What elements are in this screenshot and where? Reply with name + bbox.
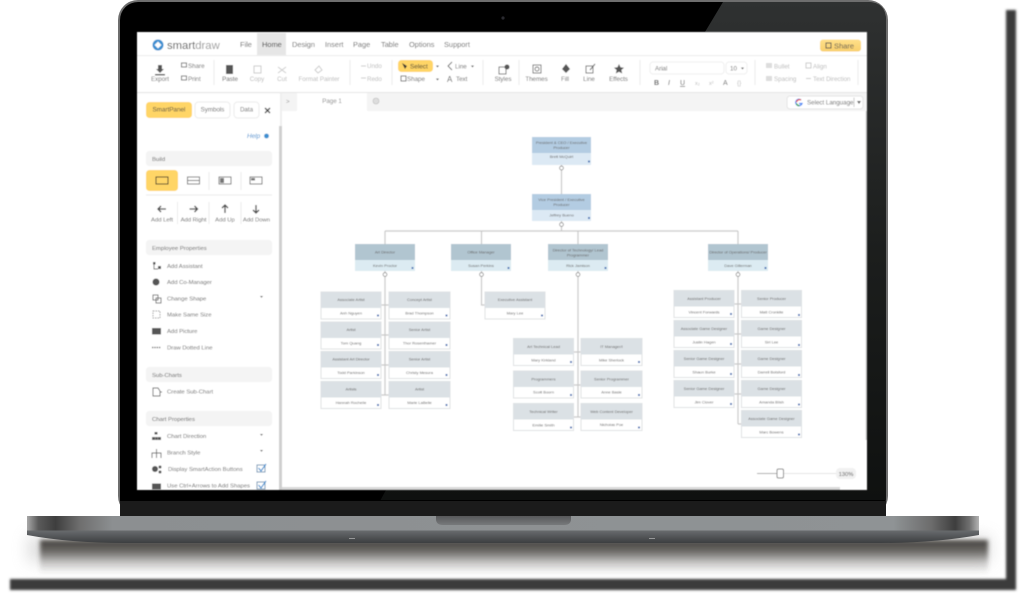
- operations team: Game Designer: [757, 326, 786, 331]
- box: President: Producer: [553, 145, 570, 150]
- ribbon toolbar: Share: [188, 63, 205, 70]
- ribbon toolbar: [137, 60, 867, 93]
- employee properties: Employee Properties: [152, 246, 207, 252]
- box: Vice President: Jeffrey Bueno: [549, 212, 575, 218]
- employee properties: Add Picture: [167, 329, 198, 335]
- panel tabs: SmartPanel: [153, 106, 185, 114]
- ribbon toolbar: Print: [188, 76, 201, 83]
- panel tabs: Symbols: [201, 106, 224, 114]
- box: Director of Operations: Dave Gillerman: [724, 263, 752, 268]
- ribbon toolbar: Undo: [367, 63, 382, 70]
- ribbon toolbar: Fill: [561, 76, 569, 83]
- ribbon toolbar: Shape: [407, 76, 425, 83]
- org chart connectors: [381, 165, 741, 424]
- panel tabs: [146, 102, 270, 118]
- operations team: Amanda Blish: [759, 400, 784, 404]
- logo: smartdraw: [167, 40, 221, 52]
- box: Director of Technology: Programmer: [567, 252, 590, 258]
- font selector: [650, 62, 747, 74]
- art team: Tom Quang: [341, 340, 361, 346]
- art team: Christy Mesura: [406, 370, 434, 375]
- menu bar: Options: [409, 40, 435, 49]
- language selector: Select Language: [807, 100, 854, 106]
- technology team: Programmers: [531, 376, 556, 382]
- select button: [398, 60, 433, 72]
- box: Office Manager: Susan Perkins: [468, 263, 494, 268]
- ribbon toolbar: Effects: [609, 76, 628, 83]
- text style buttons: x₂: [695, 81, 700, 87]
- zoom slider: 130%: [839, 472, 853, 478]
- box: President: [532, 137, 591, 165]
- ribbon toolbar: Redo: [367, 76, 382, 83]
- operations team: Assistant Producer: [687, 296, 721, 301]
- select button: Select: [410, 64, 428, 70]
- webcam: [501, 16, 505, 20]
- art team: Concept Artist: [407, 297, 433, 302]
- art team: Marie LaBelle: [407, 400, 432, 405]
- box: Director of Technology: Rick Jamison: [566, 263, 590, 268]
- build section: Build: [152, 157, 165, 163]
- ribbon toolbar: Bullet: [774, 64, 790, 70]
- ribbon toolbar: Spacing: [774, 76, 797, 83]
- share button: [820, 40, 861, 52]
- chart properties: Display SmartAction Buttons: [168, 467, 243, 473]
- ribbon toolbar: Styles: [495, 76, 511, 83]
- page tab bar: Page 1: [322, 98, 342, 105]
- operations team: Game Designer: [757, 356, 786, 361]
- technology team: [514, 338, 642, 430]
- employee properties: Change Shape: [167, 296, 207, 302]
- box: Vice President: Vice President / Executive: [538, 197, 585, 202]
- employee properties: Add Assistant: [167, 264, 203, 270]
- menu bar: Insert: [325, 40, 343, 49]
- language selector: [787, 96, 863, 109]
- box: Director of Operations: [708, 244, 768, 271]
- box: Executive Assistant: [485, 292, 545, 319]
- ribbon toolbar: Line: [583, 76, 595, 83]
- ribbon toolbar: Paste: [222, 76, 238, 83]
- operations team: Game Designer: [757, 386, 786, 391]
- art team: Todd Parkinson: [337, 370, 365, 375]
- ribbon toolbar: Text: [456, 76, 468, 83]
- box: Art Director: Art Director: [375, 250, 396, 254]
- add direction buttons: [151, 205, 270, 224]
- operations team: Senior Producer: [757, 296, 787, 301]
- ribbon toolbar: Text Direction: [813, 76, 851, 83]
- laptop lid: [118, 0, 888, 516]
- box: Executive Assistant: Executive Assistant: [498, 297, 533, 302]
- art team: Thor Rosenthamer: [403, 340, 437, 346]
- operations team: Darrell Botsford: [758, 370, 785, 374]
- operations team: Associate Game Designer: [748, 416, 795, 421]
- operations team: Associate Game Designer: [681, 326, 728, 331]
- base shadow: [28, 536, 990, 574]
- box: President: Brett McQuirt: [550, 154, 574, 159]
- canvas scrollbars: [282, 111, 867, 490]
- panel tabs: Data: [240, 106, 254, 114]
- operations team: [674, 290, 802, 438]
- ribbon toolbar: Copy: [250, 76, 265, 83]
- ribbon toolbar: Cut: [277, 76, 287, 83]
- text style buttons: B: [654, 80, 659, 87]
- operations team: Vincent Forwards: [688, 310, 720, 314]
- technology team: Emilie Smith: [532, 422, 555, 428]
- text style buttons: [654, 80, 742, 87]
- ribbon toolbar: Align: [813, 64, 827, 70]
- technology team: Anne Basle: [601, 390, 622, 394]
- operations team: Justin Hagen: [692, 340, 716, 344]
- app screen: [137, 32, 867, 490]
- art team: Artist: [346, 327, 356, 332]
- technology team: Mike Sherlock: [599, 358, 624, 362]
- share button: Share: [834, 42, 854, 50]
- text style buttons: x²: [709, 81, 714, 87]
- art team: Associate Artist: [337, 297, 366, 302]
- technology team: Technical Writer: [529, 409, 558, 414]
- art team: Senior Artist: [409, 356, 431, 362]
- menu bar: Support: [444, 40, 470, 49]
- technology team: Scott Boorn: [533, 390, 554, 394]
- technology team: Art Technical Lead: [527, 344, 560, 349]
- text style buttons: {}: [737, 80, 742, 87]
- build section: [146, 151, 272, 224]
- art team: [321, 292, 450, 408]
- font selector: 10: [730, 66, 737, 72]
- technology team: Mary Kirkland: [531, 358, 556, 362]
- menu bar: File: [240, 40, 252, 49]
- operations team: Shaun Burke: [692, 370, 716, 374]
- menu bar: Page: [353, 40, 370, 49]
- operations team: Senior Game Designer: [684, 356, 725, 361]
- box: Director of Operations: Director of Operations/ Producer: [709, 250, 767, 254]
- employee properties: [146, 240, 272, 352]
- employee properties: Add Co-Manager: [167, 280, 212, 286]
- add direction buttons: Add Right: [181, 218, 207, 224]
- ribbon toolbar: Themes: [525, 76, 548, 83]
- text style buttons: U: [680, 80, 685, 87]
- box: Executive Assistant: Mary Lee: [507, 310, 524, 316]
- add direction buttons: Add Up: [215, 218, 236, 224]
- chart properties: [146, 411, 272, 490]
- employee properties: Make Same Size: [167, 312, 212, 318]
- laptop base: [27, 516, 979, 543]
- box: Director of Technology: [548, 244, 608, 271]
- sub-charts: [146, 367, 272, 396]
- ribbon toolbar: Export: [151, 76, 169, 83]
- art team: Brad Thompson: [405, 310, 434, 316]
- menu bar: Design: [292, 40, 315, 49]
- sub-charts: Create Sub-Chart: [167, 390, 214, 396]
- operations team: Senior Game Designer: [684, 386, 725, 391]
- technology team: Nicholas Poe: [600, 422, 624, 427]
- font selector: Arial: [655, 66, 667, 72]
- chart properties: Branch Style: [167, 450, 201, 456]
- art team: Artist: [415, 386, 425, 392]
- box: Office Manager: [451, 244, 511, 271]
- page tab bar: [282, 93, 867, 111]
- trackpad notch: [436, 516, 571, 525]
- operations team: Siri Lee: [765, 340, 779, 344]
- technology team: IT Manager/I: [600, 344, 623, 349]
- box: Office Manager: Office Manager: [467, 250, 495, 254]
- ribbon toolbar: Line: [455, 64, 467, 70]
- employee properties: Draw Dotted Line: [167, 346, 213, 352]
- chart properties: Use Ctrl+Arrows to Add Shapes: [167, 484, 250, 490]
- add direction buttons: Add Down: [243, 218, 270, 224]
- ribbon toolbar: A: [447, 75, 453, 84]
- help link: [247, 133, 269, 140]
- text style buttons: A: [723, 80, 728, 87]
- add direction buttons: Add Left: [151, 218, 173, 224]
- box: Vice President: Producer: [553, 202, 570, 207]
- text style buttons: I: [668, 80, 670, 87]
- ribbon toolbar: Format Painter: [299, 76, 339, 83]
- help link: Help: [247, 133, 261, 140]
- org chart: [321, 137, 802, 438]
- menu bar: Table: [381, 40, 399, 49]
- art team: Senior Artist: [409, 327, 431, 332]
- box: Art Director: Kevin Proctor: [373, 263, 398, 268]
- sub-charts: Sub-Charts: [152, 373, 182, 379]
- art team: Assistant Art Director: [332, 356, 370, 362]
- box: Art Director: [355, 244, 415, 271]
- operations team: Marc Bowens: [759, 430, 784, 434]
- box: Vice President: [532, 194, 591, 221]
- menu bar: [137, 33, 867, 56]
- operations team: Matt Cronkite: [760, 310, 784, 314]
- operations team: Jim Clover: [695, 400, 714, 404]
- chart properties: Chart Direction: [167, 434, 206, 440]
- menu bar: Home: [262, 40, 282, 49]
- chart properties: Chart Properties: [152, 417, 195, 423]
- box: President: President & CEO / Executive: [536, 140, 588, 145]
- zoom slider: [757, 468, 856, 479]
- art team: Artists: [345, 386, 357, 392]
- art team: Anh Nguyen: [340, 310, 362, 316]
- box: Director of Technology: Director of Technology/ Lead: [553, 248, 603, 252]
- expand nodes: [383, 166, 740, 276]
- page tab bar: >: [286, 98, 290, 106]
- technology team: Senior Programmer: [594, 376, 630, 382]
- art team: Hannah Rochelle: [336, 400, 367, 405]
- technology team: Web Content Developer: [590, 409, 633, 414]
- side panel: [146, 93, 282, 490]
